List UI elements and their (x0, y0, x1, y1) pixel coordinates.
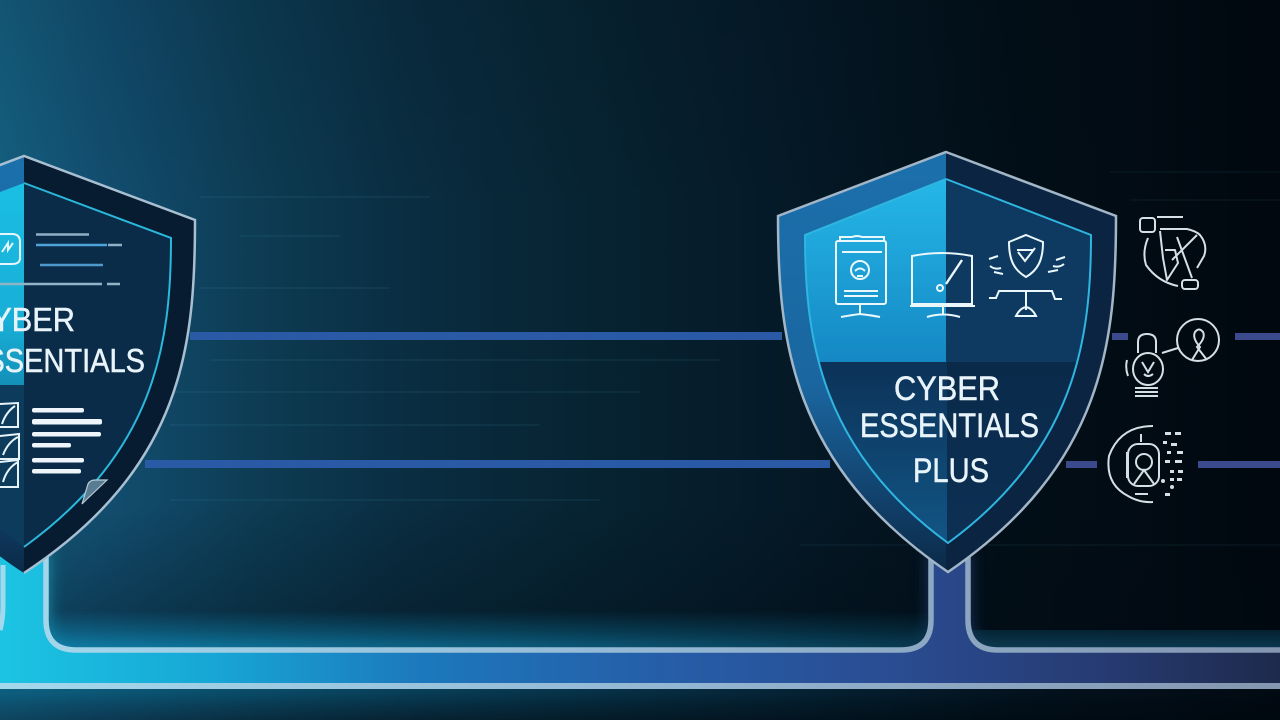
shield: Cyber Essentials Plus (770, 148, 1116, 578)
icon: clipboard on stand (836, 236, 886, 317)
icon: biometric face scan (1108, 426, 1159, 502)
icon: data dots (1161, 432, 1183, 496)
icon: chart badge (0, 234, 20, 264)
label: PLUS: PLUS (913, 452, 989, 490)
icon: padlock linked to user (1126, 319, 1219, 396)
icon: network shield cluster (1140, 217, 1205, 289)
shield: Cyber Essentials (cropped left) (0, 150, 195, 580)
text lines: upper list (0, 234, 122, 284)
icon: paper corner (82, 480, 107, 504)
label: ESSENTIALS: ESSENTIALS (860, 407, 1039, 445)
text lines: lower list (32, 408, 102, 474)
label: CYBER: CYBER (894, 370, 1000, 408)
glowing bus band with rounded panels (0, 550, 1280, 720)
icon: monitor (910, 253, 975, 317)
connector line: lower horizontal (145, 460, 1280, 468)
connector line: upper horizontal (190, 332, 1280, 340)
icon: shield on balance (989, 235, 1065, 316)
icon: checklist boxes (0, 403, 19, 487)
